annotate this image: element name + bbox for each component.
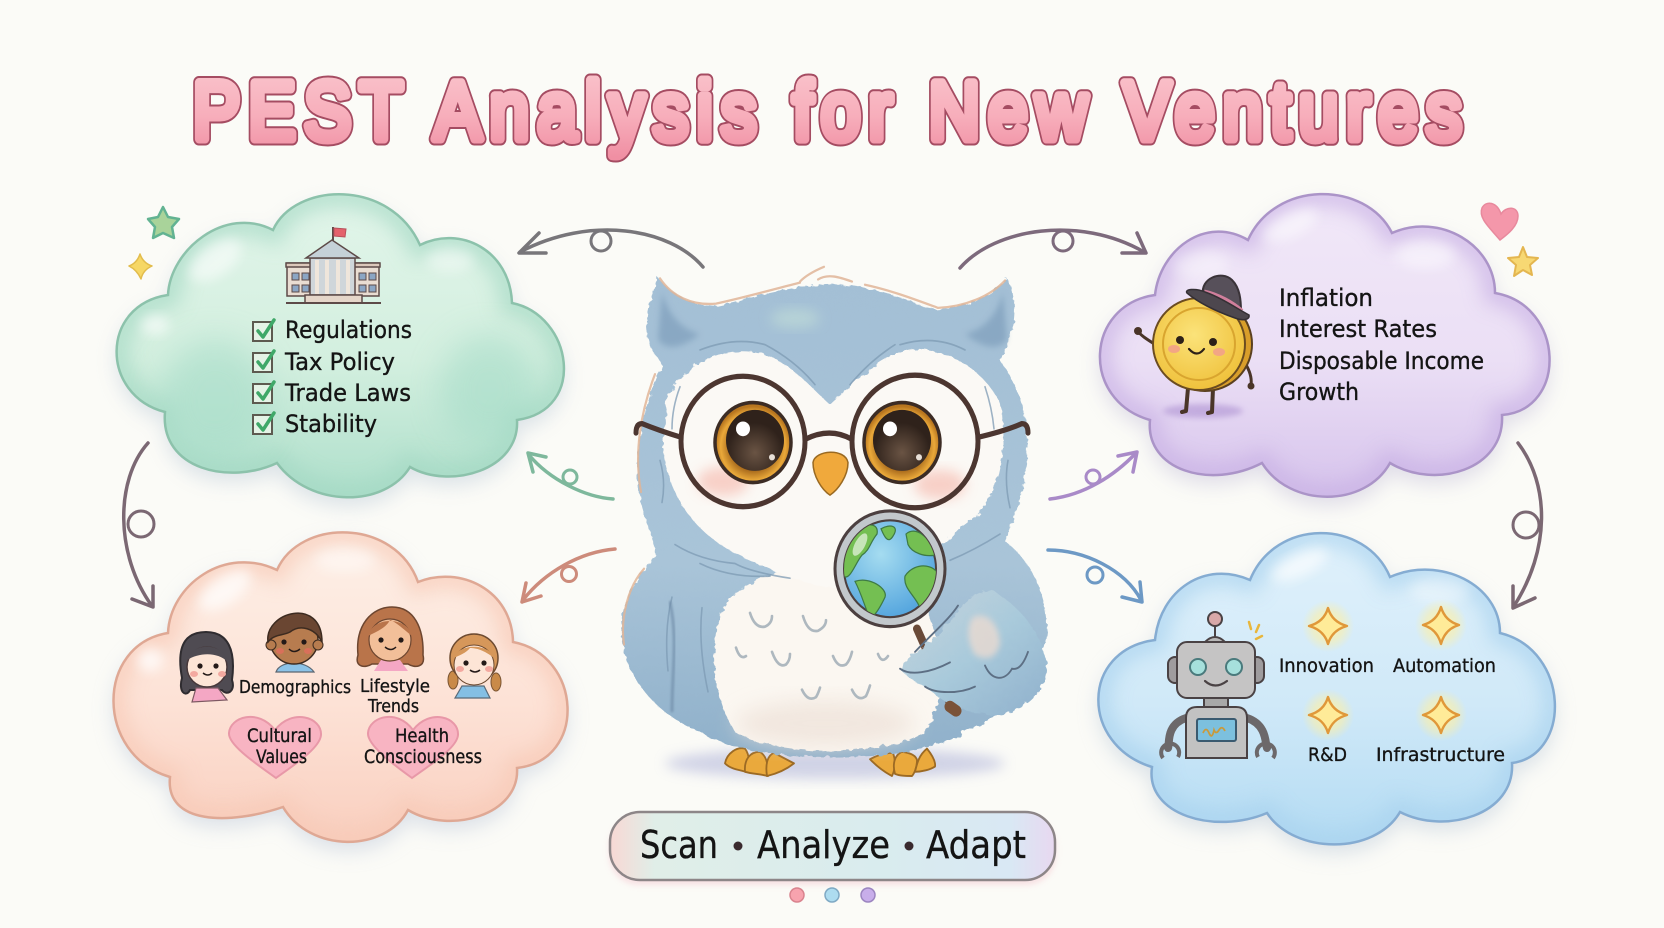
- neck and belly white: [714, 560, 941, 751]
- arrow: owl to technology: [1048, 550, 1142, 602]
- title: PEST Analysis for New Ventures: [193, 66, 1470, 157]
- head ear shading: [658, 292, 700, 347]
- chest feathers: [736, 613, 888, 699]
- icon: right heart: [368, 717, 458, 778]
- panel: political cloud: [117, 194, 564, 506]
- social labels: Values: [256, 746, 307, 768]
- arrow: owl to social: [522, 549, 615, 602]
- left wing line: [670, 602, 674, 711]
- icon: person with brown skin: [266, 613, 323, 672]
- economic factors list: Inflation: [1279, 284, 1373, 312]
- technology labels: Innovation: [1279, 655, 1374, 677]
- pagination dots: [790, 888, 875, 902]
- icon: green star: [148, 207, 179, 238]
- economic factors list: Disposable Income: [1279, 347, 1484, 375]
- social labels: [239, 676, 482, 768]
- arrow: owl to political, top: [519, 230, 703, 267]
- owl feet: [725, 748, 935, 776]
- magnifying glass with globe: [835, 511, 953, 710]
- icon: innovation sparkle: [1302, 600, 1354, 652]
- arrow: owl to political, lower: [528, 453, 613, 499]
- panel: social cloud: [113, 532, 568, 851]
- eye left: [715, 403, 791, 482]
- slogan pill: Scan: [640, 823, 718, 867]
- glasses: [636, 375, 1028, 508]
- panel: technological cloud: [1098, 533, 1555, 853]
- arrow: political to social: [124, 443, 154, 607]
- social labels: Health: [395, 725, 449, 747]
- economic factors list: [1279, 284, 1484, 406]
- social labels: Demographics: [239, 677, 351, 698]
- icon: automation sparkle: [1415, 599, 1467, 651]
- checklist: Tax Policy: [284, 348, 395, 376]
- economic factors list: Interest Rates: [1279, 315, 1437, 343]
- technology labels: R&D: [1308, 744, 1347, 766]
- icon: yellow star: [1508, 247, 1538, 276]
- beak: [813, 452, 848, 495]
- owl mascot: [621, 267, 1047, 779]
- title: PEST Analysis for New Ventures: [193, 66, 1470, 157]
- icon: research sparkle: [1302, 689, 1354, 741]
- face mask: [663, 349, 1003, 589]
- social labels: Consciousness: [364, 746, 482, 768]
- icon: person with long brown hair: [357, 607, 423, 671]
- eye right: [864, 403, 940, 482]
- owl wing: [900, 591, 1047, 715]
- arrow: economic to technology: [1513, 443, 1542, 608]
- icon: left heart: [229, 717, 321, 778]
- social labels: Trends: [367, 696, 419, 717]
- blush: [697, 467, 749, 496]
- icon: robot: [1161, 612, 1275, 758]
- checklist: Regulations: [285, 316, 412, 344]
- checklist: [253, 316, 412, 438]
- icon: person with dark hair: [180, 632, 233, 702]
- slogan pill: [609, 812, 1056, 885]
- icon: person with blonde braids: [448, 634, 501, 698]
- icon: coin character: [1134, 276, 1254, 418]
- fur strokes: [660, 340, 1010, 692]
- economic factors list: Growth: [1279, 378, 1359, 406]
- icon: pink heart: [1481, 203, 1518, 240]
- ground shadow: [665, 748, 1005, 779]
- owl body: [621, 276, 1047, 757]
- slogan pill: Adapt: [926, 823, 1026, 867]
- slogan pill: Analyze: [757, 823, 890, 867]
- social labels: Lifestyle: [360, 676, 430, 697]
- technology labels: [1279, 655, 1505, 766]
- technology labels: Infrastructure: [1376, 744, 1505, 766]
- arrow: owl to economic, lower: [1050, 452, 1137, 499]
- icon: government building: [286, 227, 381, 303]
- icon: infrastructure sparkle: [1415, 689, 1467, 741]
- icon: yellow sparkle: [129, 254, 152, 279]
- checklist: Trade Laws: [284, 379, 411, 407]
- owl fringe: [623, 267, 1005, 644]
- technology labels: Automation: [1393, 655, 1496, 677]
- belly shading: [735, 700, 915, 747]
- panel: economic cloud: [1100, 194, 1550, 506]
- arrow: owl to economic, top: [960, 230, 1146, 268]
- checklist: Stability: [285, 410, 377, 438]
- social labels: Cultural: [247, 725, 312, 747]
